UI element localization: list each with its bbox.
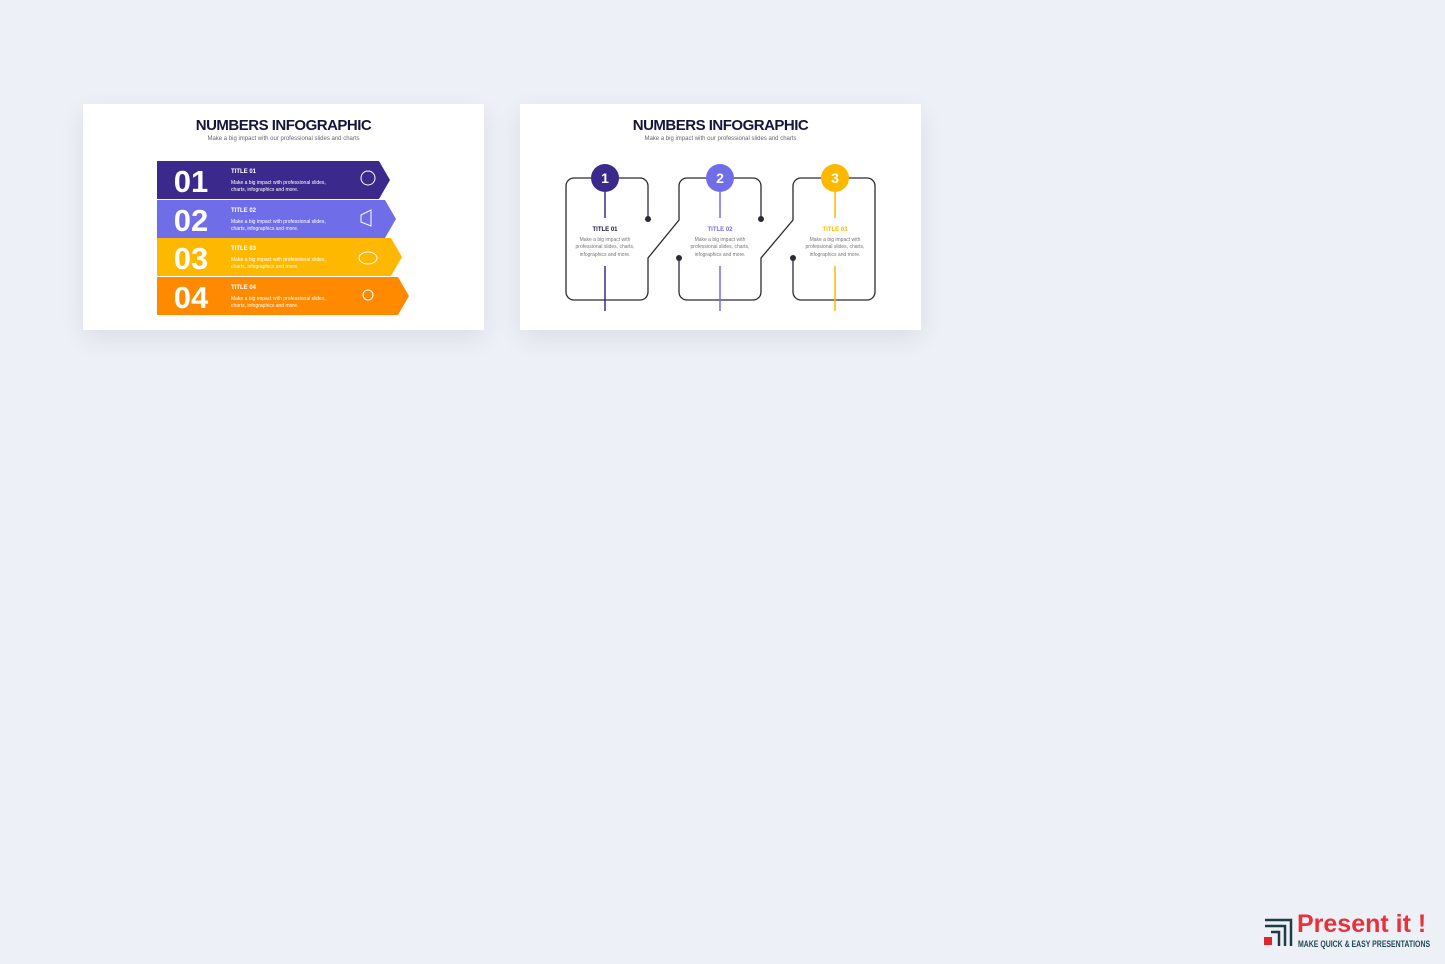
- title: NUMBERS INFOGRAPHIC: [633, 117, 808, 134]
- logo: Present it: MAKE QUICK & EASY PRESENTATIONS: [1298, 939, 1430, 949]
- step 3: 3: [831, 170, 839, 186]
- band 03: charts, infographics and more.: [231, 264, 298, 270]
- band 03: Make a big impact with professional slides,: [231, 257, 326, 263]
- band 02: [157, 200, 396, 238]
- step 1: professional slides, charts,: [576, 244, 634, 250]
- band 02: charts, infographics and more.: [231, 226, 298, 232]
- step 1: [576, 164, 634, 311]
- band 04: 04: [174, 280, 209, 315]
- band 01: Make a big impact with professional slides,: [231, 180, 326, 186]
- step 3: TITLE 03: [822, 227, 848, 233]
- band 04: Make a big impact with professional slides,: [231, 296, 326, 302]
- band 04: TITLE 04: [231, 285, 257, 291]
- step diagram: [565, 164, 876, 311]
- subtitle: Make a big impact with our professional slides and charts: [207, 136, 360, 142]
- band 01: 01: [174, 164, 208, 199]
- step 1: TITLE 01: [592, 227, 618, 233]
- title: NUMBERS INFOGRAPHIC: [196, 117, 371, 134]
- step 3: infographics and more.: [810, 252, 860, 258]
- band 03: [157, 238, 402, 276]
- step 2: TITLE 02: [707, 227, 733, 233]
- step 2: [691, 164, 749, 311]
- band 04: [157, 277, 409, 315]
- band 02: Make a big impact with professional slides,: [231, 219, 326, 225]
- panel: slide 2 steps: [520, 104, 921, 330]
- panel: slide 1 numbered arrows: [83, 104, 484, 330]
- step 2: infographics and more.: [695, 252, 745, 258]
- step 2: professional slides, charts,: [691, 244, 749, 250]
- band 01: [157, 161, 390, 199]
- step 3: professional slides, charts,: [806, 244, 864, 250]
- step 3: Make a big impact with: [810, 237, 861, 243]
- brand text: Present it !: [1297, 910, 1426, 938]
- step 1: Make a big impact with: [580, 237, 631, 243]
- step 2: Make a big impact with: [695, 237, 746, 243]
- arrow bands: [157, 161, 409, 315]
- band 04: charts, infographics and more.: [231, 303, 298, 309]
- icon: logo mark: [1264, 918, 1292, 946]
- band 02: TITLE 02: [231, 208, 257, 214]
- step 1: infographics and more.: [580, 252, 630, 258]
- band 01: charts, infographics and more.: [231, 187, 298, 193]
- step 1: 1: [601, 170, 609, 186]
- step 2: 2: [716, 170, 724, 186]
- band 03: 03: [174, 241, 208, 276]
- subtitle: Make a big impact with our professional slides and charts: [644, 136, 797, 142]
- band 01: TITLE 01: [231, 169, 257, 175]
- band 02: 02: [174, 203, 208, 238]
- band 03: TITLE 03: [231, 246, 257, 252]
- logo: Present it: [1264, 910, 1430, 949]
- step 3: [806, 164, 864, 311]
